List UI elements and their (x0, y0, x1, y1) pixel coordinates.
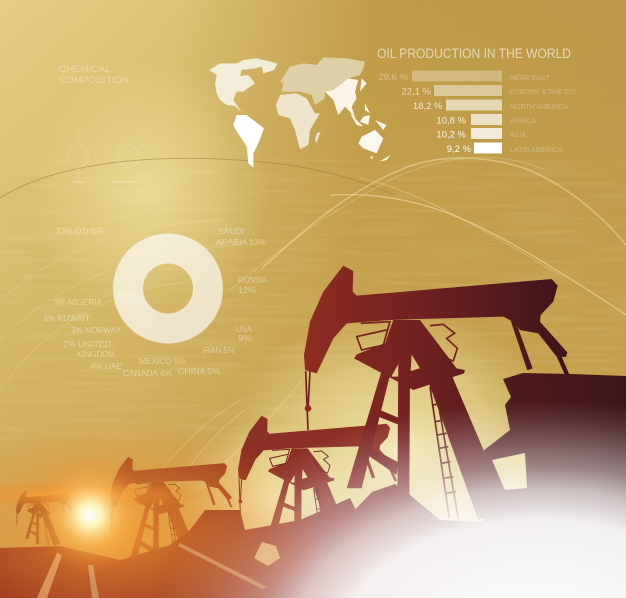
bar: Latin America (447, 142, 563, 155)
bar: Latin America: LATIN AMERICA (510, 147, 563, 154)
donut labels: IRAN 5% (202, 345, 235, 355)
map: Africa (276, 93, 321, 149)
bar: Africa: AFRICA (510, 118, 536, 125)
donut labels: CHINA 5% (178, 366, 220, 376)
donut labels: 4% UAE (90, 361, 122, 371)
gold window in ground (492, 453, 527, 490)
bar: Asia (436, 128, 526, 140)
world map (209, 57, 391, 167)
map: South America (233, 115, 264, 167)
bar: Near East (378, 70, 550, 83)
donut labels: RUSSIA (238, 275, 267, 285)
chart: oil production in the world (377, 46, 576, 155)
donut labels: 3% NORWAY (71, 325, 121, 335)
bar: Near East: 29,6 % (378, 72, 409, 83)
map: Australia (358, 130, 391, 162)
lens flare (0, 420, 320, 598)
donut labels: SAUDI (218, 226, 244, 236)
bar: North America: 18,2 % (413, 101, 443, 112)
bar: North America (413, 100, 569, 112)
pumpjack: left (110, 457, 233, 574)
bar: Near East: NEAR EAST (510, 75, 550, 82)
donut chart (113, 248, 208, 340)
map: Europe and CIS / Near East (280, 57, 365, 105)
donut labels (43, 226, 267, 378)
white fade lower right (0, 360, 626, 598)
pumpjack: large foreground (304, 266, 569, 520)
donut labels: USA (236, 324, 252, 334)
donut labels: ARABIA 13% (216, 237, 266, 247)
bar: Europe and the CIS: EUROPE & THE CIS (510, 89, 576, 96)
icon: faint chemical structure (58, 130, 145, 182)
bar: Europe and the CIS: 22,1 % (401, 86, 432, 98)
ground silhouette (0, 373, 626, 598)
bar: Africa (436, 114, 536, 126)
donut labels: MEXICO 5% (139, 356, 186, 366)
bar: Africa: 10,8 % (436, 116, 467, 126)
donut labels: CANADA 4% (123, 368, 172, 378)
bar: Asia: 10,2 % (436, 130, 467, 140)
donut labels: KINGDOM (77, 349, 115, 359)
donut labels: 32% OTHER (56, 226, 104, 236)
donut labels: 3% NIGERIA (54, 297, 102, 307)
pumpjack: middle (238, 416, 397, 568)
donut labels: 3% KUWAIT (43, 313, 90, 323)
chart title: OIL PRODUCTION IN THE WORLD (377, 46, 571, 61)
decorative wave band (0, 157, 626, 598)
bar: North America: NORTH AMERICA (510, 104, 569, 111)
bar: Latin America: 9,2 % (447, 144, 472, 155)
heading: chemical composition: COMPOSITION (59, 75, 129, 86)
bar: Asia: ASIA (510, 132, 526, 139)
pumpjack: far left (16, 491, 73, 546)
donut labels: 12% (238, 285, 256, 295)
map: North America (209, 58, 277, 112)
donut labels: 9% (238, 333, 252, 343)
heading: chemical composition: CHEMICAL (59, 64, 111, 75)
bar: Europe and the CIS (401, 85, 576, 98)
donut labels: 2% UNITED (63, 339, 111, 349)
map: Asia (325, 78, 387, 130)
heading: chemical composition (59, 64, 129, 86)
